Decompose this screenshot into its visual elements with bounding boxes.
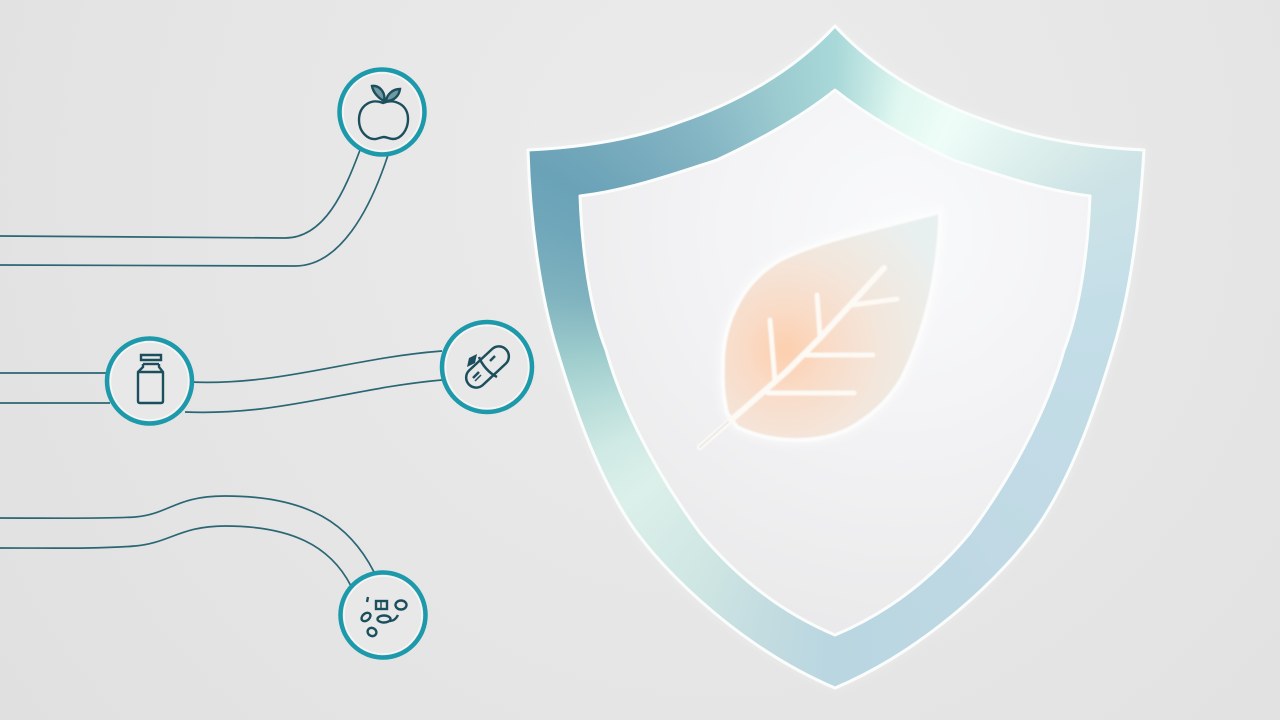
icon badge: bottle [107, 338, 192, 424]
leaf glow [723, 212, 940, 440]
shield [526, 24, 1146, 690]
icon badge: capsule [442, 322, 532, 412]
connector: particles pathway [0, 496, 374, 586]
shield coloured band [528, 28, 1142, 686]
icon: leaf [700, 212, 940, 447]
icon badge: apple [340, 70, 424, 154]
icon: particles [360, 597, 406, 638]
icon: apple [359, 86, 408, 139]
icon: bottle [138, 355, 163, 403]
leaf veins [700, 268, 897, 447]
leaf stem hollow [700, 422, 728, 447]
shield white outlines [528, 26, 1144, 688]
icon: capsule [462, 342, 513, 392]
connector: bottle and capsule pathway [0, 351, 442, 412]
leaf body [723, 212, 940, 440]
shield inner panel [580, 90, 1090, 635]
shield outer glow [528, 26, 1144, 688]
connector: apple pathway [0, 150, 388, 266]
icon badge: particles [340, 572, 426, 658]
icon: capsule fragment [467, 354, 477, 367]
